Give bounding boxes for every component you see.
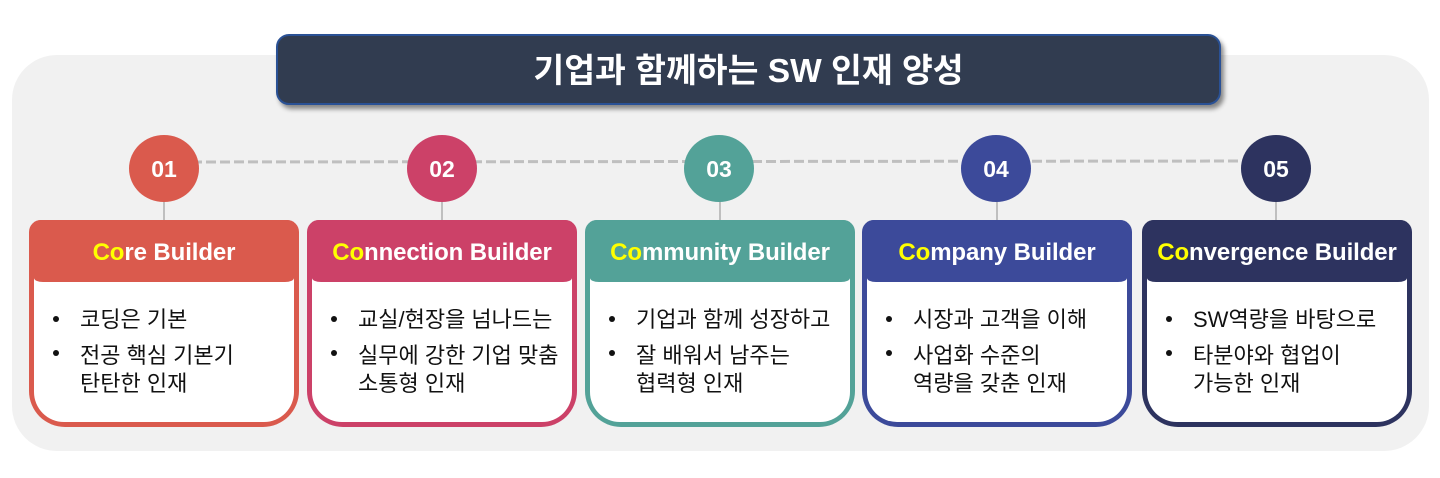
bullet text: 잘 배워서 남주는 [636,343,790,368]
bullet [1166,316,1172,322]
bullet text: 시장과 고객을 이해 [913,307,1087,332]
bullet text [358,343,558,396]
step 02 circle: 02 [429,156,455,182]
bullet text [913,343,1067,396]
bullet text: 타분야와 협업이 [1193,343,1341,368]
bullet [609,316,615,322]
card body [1147,270,1407,422]
step 03 circle: 03 [706,156,732,182]
bullet [53,350,59,356]
bullet text: 코딩은 기본 [80,307,187,332]
bullet text [636,343,790,396]
card heading: Company Builder [898,239,1096,266]
step 01 circle [129,135,199,202]
bullet text: 소통형 인재 [358,371,465,396]
bullet [609,350,615,356]
bullet text: 역량을 갖춘 인재 [913,371,1067,396]
card body [312,270,572,422]
card body [867,270,1127,422]
title [276,34,1221,105]
card: Company Builder [862,220,1132,427]
card body [590,270,850,422]
bullet [1166,350,1172,356]
step 03 circle [684,135,754,202]
card: Convergence Builder [1142,220,1412,427]
step 04 circle: 04 [983,156,1009,182]
card heading [312,220,572,282]
card heading: Core Builder [93,239,235,266]
step 02 circle [407,135,477,202]
card heading [1147,220,1407,282]
bullet text: 기업과 함께 성장하고 [636,307,830,332]
bullet [331,316,337,322]
step 05 circle [1241,135,1311,202]
bullet [53,316,59,322]
bullet [886,316,892,322]
card: Connection Builder [307,220,577,427]
step 04 circle [961,135,1031,202]
step 05 circle: 05 [1263,156,1289,182]
title: 기업과 함께하는 SW 인재 양성 [533,53,964,90]
card heading [590,220,850,282]
card: Community Builder [585,220,855,427]
bullet text: 실무에 강한 기업 맞춤 [358,343,558,368]
card heading: Connection Builder [332,239,552,266]
step 05 connector [1275,201,1277,220]
bullet [331,350,337,356]
step 02 connector [441,201,443,220]
bullet text: 교실/현장을 넘나드는 [358,307,552,332]
bullet text: SW역량을 바탕으로 [1193,307,1376,332]
card: Core Builder [29,220,299,427]
step 03 connector [719,201,721,220]
bullet text [1193,343,1341,396]
card heading: Community Builder [610,239,830,266]
bullet text: 협력형 인재 [636,371,743,396]
step 01 circle: 01 [151,156,177,182]
card heading [867,220,1127,282]
bullet text: 사업화 수준의 [913,343,1041,368]
bullet text [80,343,234,396]
bullet text: 탄탄한 인재 [80,371,187,396]
bullet [886,350,892,356]
step 01 connector [163,201,165,220]
card heading: Convergence Builder [1157,239,1397,266]
bullet text: 전공 핵심 기본기 [80,343,234,368]
card heading [34,220,294,282]
step 04 connector [996,201,998,220]
bullet text: 가능한 인재 [1193,371,1300,396]
card body [34,270,294,422]
